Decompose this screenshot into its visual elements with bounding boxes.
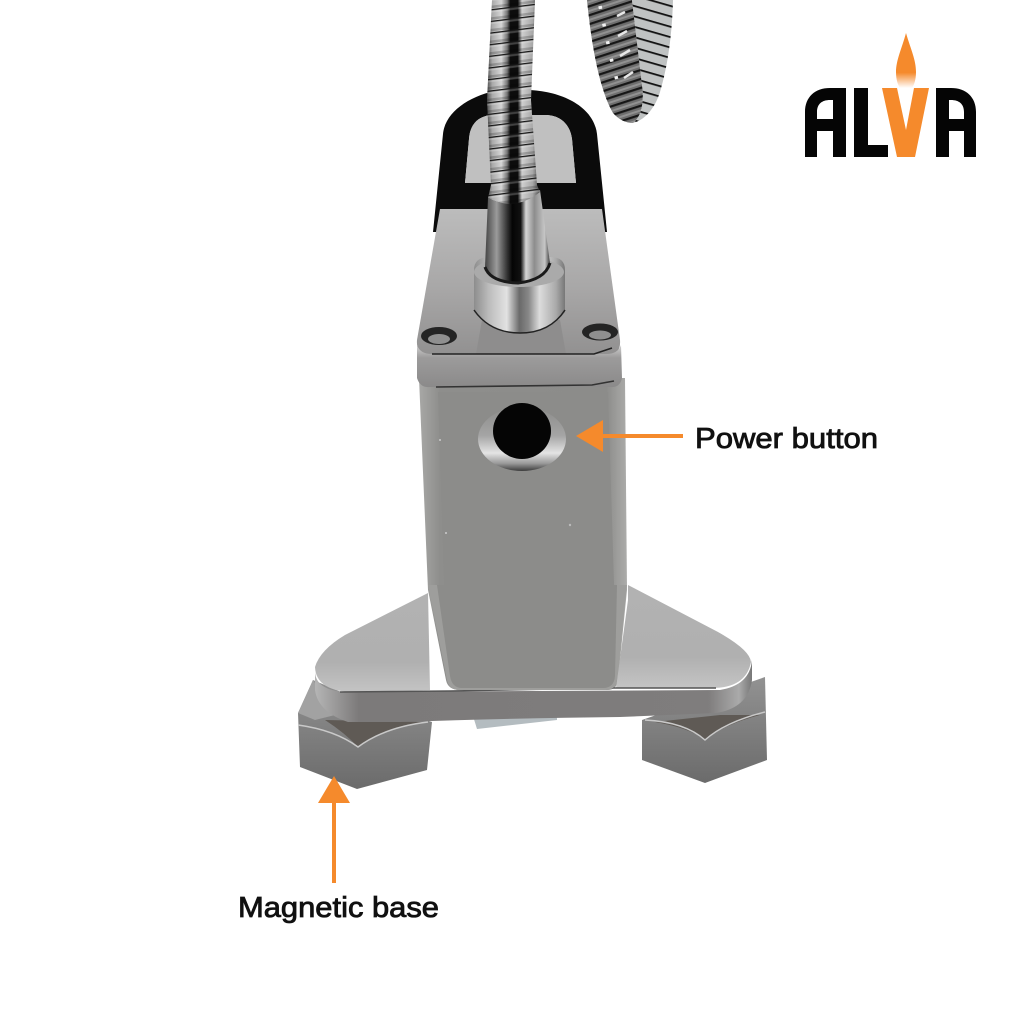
logo: ALVA <box>805 33 976 157</box>
ferrule <box>485 190 550 283</box>
logo letter A <box>805 88 846 157</box>
magnetic foot: right <box>642 677 767 783</box>
screw: right <box>582 324 618 340</box>
gooseneck: rear loop <box>587 0 673 123</box>
logo letter V <box>882 88 929 157</box>
base tab underside <box>473 716 557 729</box>
logo letter A <box>936 88 976 157</box>
magnetic foot: left <box>298 680 432 789</box>
logo letter L <box>854 88 888 157</box>
collar <box>474 257 565 333</box>
top plate <box>417 209 622 387</box>
column body <box>419 378 627 690</box>
base plate <box>315 585 752 722</box>
gooseneck: front <box>487 0 540 204</box>
column front face over base <box>428 585 627 690</box>
label: magnetic base: Magnetic base <box>238 892 439 924</box>
power button recess <box>478 403 566 471</box>
handle: black loop bracket <box>433 90 607 232</box>
arrow: power button <box>576 420 683 452</box>
logo flame <box>896 33 916 88</box>
arrow: magnetic base <box>318 776 350 883</box>
handle window <box>465 115 576 183</box>
screw: left <box>421 327 457 345</box>
label: power button: Power button <box>695 423 878 455</box>
